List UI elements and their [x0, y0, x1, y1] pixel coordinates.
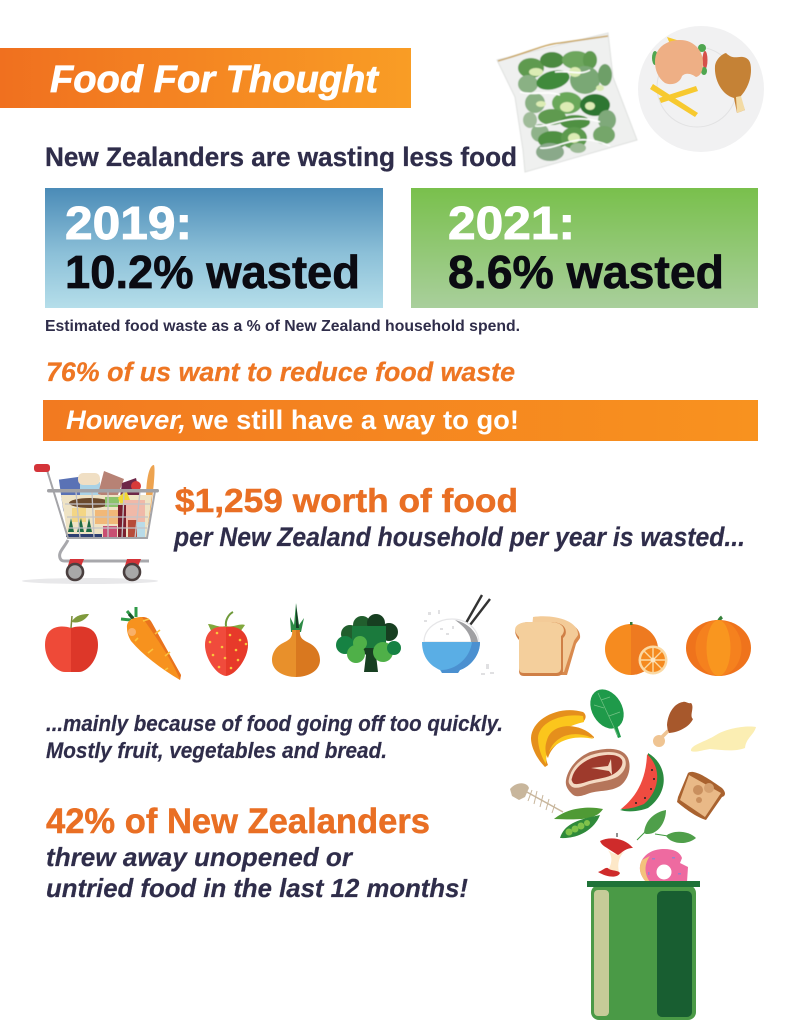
panel: 2019 stat: 2019: — [65, 197, 192, 249]
text: unopened food — [46, 842, 468, 903]
icon: apple core — [598, 833, 633, 877]
icon: plate of leftovers — [638, 26, 764, 152]
stat description: per New Zealand household per year is wasted... — [173, 522, 745, 552]
icon: banana — [531, 710, 594, 767]
banner: however: However, — [66, 405, 186, 435]
text: unopened food: untried food in the last 12 months! — [46, 873, 468, 903]
icon: green bin — [587, 881, 700, 1020]
icon: orange with slice — [605, 622, 668, 675]
icon: bread slices — [515, 616, 580, 676]
icon: green leaves — [637, 810, 696, 843]
icon: frozen broccoli bag — [497, 33, 637, 172]
icon: steak — [566, 749, 630, 796]
stat: dollar value: $1,259 worth of food — [175, 482, 518, 519]
footnote: Estimated food waste as a % of New Zealand household spend. — [45, 318, 520, 335]
panel: 2019 stat — [45, 188, 383, 308]
subheading: New Zealanders are wasting less food — [45, 142, 517, 172]
panel: 2019 stat: 10.2% wasted — [65, 246, 360, 298]
title banner — [0, 48, 411, 108]
text: main reason — [46, 711, 503, 763]
icon: bitten donut — [640, 849, 688, 882]
icon: shopping cart — [22, 464, 159, 584]
banner: however — [43, 400, 758, 441]
stat: 42 percent: 42% of New Zealanders — [46, 802, 430, 841]
icon: burnt toast — [677, 772, 725, 820]
icon: onion — [272, 603, 320, 677]
text: main reason: ...mainly because of food going off too quickly. — [46, 711, 503, 736]
icon: butter smear — [691, 726, 756, 752]
icon: fish bone — [510, 783, 563, 813]
panel: 2021 stat: 2021: — [448, 197, 575, 249]
banner: however: we still have a way to go! — [191, 405, 519, 435]
panel: 2021 stat — [411, 188, 758, 308]
title text: Food For Thought — [50, 59, 379, 101]
icon: carrot — [121, 607, 181, 680]
icon: chicken leg — [653, 702, 693, 747]
icon: apple — [45, 614, 98, 672]
icon: watermelon slice — [620, 753, 664, 811]
panel: 2021 stat: 8.6% wasted — [448, 246, 724, 298]
callout: 76 percent: 76% of us want to reduce food waste — [46, 357, 515, 387]
icon: broccoli — [336, 614, 401, 672]
icon: spinach leaf — [584, 683, 630, 738]
text: unopened food: threw away unopened or — [46, 842, 354, 872]
icon: pumpkin — [686, 617, 751, 676]
icon: rice bowl with chopsticks — [422, 595, 494, 675]
icon: strawberry — [205, 612, 248, 676]
icon: peas — [554, 808, 603, 838]
text: main reason: Mostly fruit, vegetables and bread. — [46, 738, 387, 763]
